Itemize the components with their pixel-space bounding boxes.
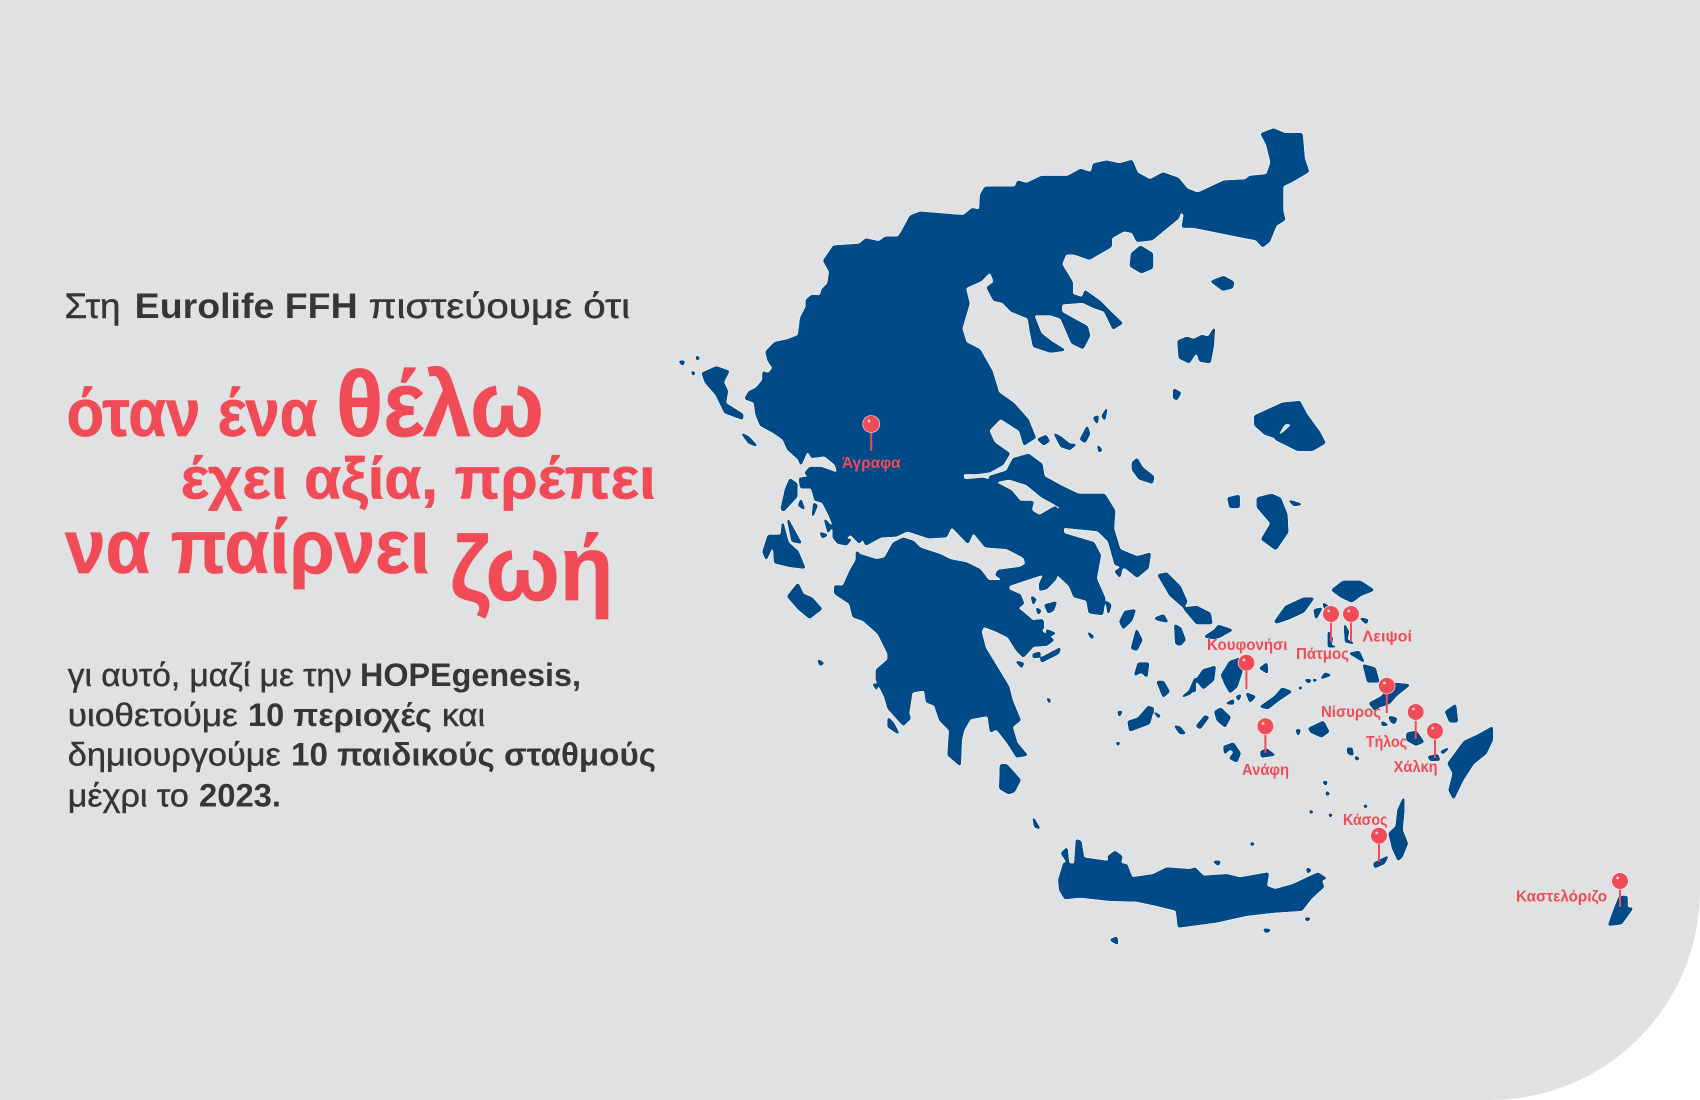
- body text: δημιουργούμε: [68, 736, 281, 772]
- Peloponnese, Crete and western Cyclades: [818, 538, 1323, 944]
- headline: θέλω: [336, 352, 544, 456]
- label: Νίσυρος: Νίσυρος: [1321, 704, 1381, 721]
- label: Καστελόριζο: Καστελόριζο: [1516, 889, 1607, 906]
- label: Χάλκη: Χάλκη: [1394, 759, 1438, 776]
- pin: Ανάφη: [1257, 718, 1274, 753]
- label: Κάσος: Κάσος: [1343, 812, 1388, 829]
- pin: Λειψοί: [1343, 606, 1359, 642]
- body text: 10 παιδικούς σταθμούς: [291, 736, 656, 772]
- pin: Τήλος: [1407, 704, 1424, 739]
- Dodecanese and eastern Aegean islands: [1214, 582, 1632, 932]
- intro text: [64, 287, 630, 326]
- pin: Καστελόριζο: [1612, 873, 1628, 907]
- label: Λειψοί: Λειψοί: [1362, 629, 1412, 646]
- pin: Κάσος: [1371, 827, 1387, 862]
- body text: HOPEgenesis,: [360, 657, 581, 693]
- body text: υιοθετούμε: [68, 697, 238, 733]
- northern mainland and northern islands: [680, 129, 1325, 618]
- pin: Νίσυρος: [1378, 677, 1395, 713]
- intro text: Στη: [64, 287, 120, 326]
- intro text: πιστεύουμε ότι: [369, 287, 630, 326]
- pin: Χάλκη: [1427, 723, 1443, 758]
- intro text: Eurolife FFH: [135, 287, 358, 326]
- label: Τήλος: Τήλος: [1366, 734, 1407, 751]
- pin: Πάτμος: [1323, 606, 1339, 642]
- label: Κουφονήσι: Κουφονήσι: [1207, 637, 1288, 654]
- headline: έχει αξία, πρέπει: [181, 447, 656, 512]
- body text: 2023.: [199, 778, 281, 814]
- pin: Άγραφα: [863, 416, 880, 451]
- body text: [68, 657, 656, 814]
- body text: μέχρι το: [68, 778, 189, 814]
- map of Greece: [680, 129, 1632, 944]
- headline: [65, 352, 656, 620]
- label: Ανάφη: Ανάφη: [1242, 762, 1289, 779]
- label: Πάτμος: Πάτμος: [1296, 646, 1349, 663]
- headline: ζωή: [450, 518, 614, 620]
- body text: γι αυτό, μαζί με την: [68, 657, 352, 693]
- pin: Κουφονήσι: [1238, 654, 1255, 689]
- headline: όταν ένα: [66, 376, 318, 451]
- body text: 10 περιοχές: [248, 697, 432, 733]
- label: Άγραφα: Άγραφα: [842, 455, 901, 472]
- body text: και: [442, 697, 485, 733]
- headline: να παίρνει: [65, 505, 430, 590]
